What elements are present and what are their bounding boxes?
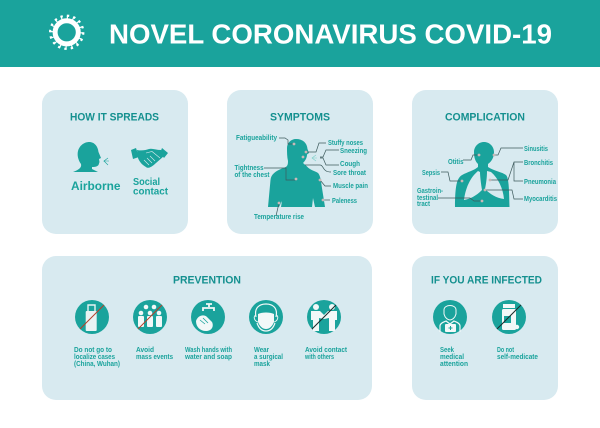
symptom labels: Paleness — [332, 198, 357, 205]
label: do not go: localize cases — [74, 354, 115, 361]
label: seek medical attention — [440, 347, 468, 368]
header band — [0, 0, 600, 67]
symptom labels: Sneezing — [340, 148, 367, 155]
symptom markers — [278, 143, 324, 204]
label: avoid mass events: mass events — [136, 354, 173, 361]
complication labels: Gastroin- — [417, 188, 444, 195]
label: seek medical attention: medical — [440, 354, 464, 361]
label: wear mask — [254, 347, 283, 368]
label: wash hands: Wash hands with — [185, 347, 232, 354]
panel: complication — [412, 90, 558, 234]
symptom labels: Stuffy noses — [328, 140, 363, 147]
heading: how it spreads: HOW IT SPREADS — [70, 112, 159, 124]
symptom labels: Fatigueability — [236, 135, 277, 142]
label: seek medical attention: attention — [440, 361, 468, 368]
label: avoid mass events — [136, 347, 173, 361]
complication labels: Bronchitis — [524, 160, 553, 167]
icon: virus — [50, 16, 83, 49]
label: wear mask: a surgical — [254, 354, 283, 361]
icon: handshake — [131, 148, 168, 168]
complication labels: Pneumonia — [524, 179, 556, 186]
label: wear mask: Wear — [254, 347, 269, 354]
complication labels: testinal — [417, 195, 438, 202]
label: avoid contact: Avoid contact — [305, 347, 348, 354]
complication labels: Myocarditis — [524, 196, 557, 203]
icon: avoid contact — [307, 300, 341, 334]
symptom labels: Temperature rise — [254, 214, 304, 221]
icon: no self medication — [492, 300, 526, 334]
label: do not self-medicate: Do not — [497, 347, 515, 354]
symptom labels: Sore throat — [333, 170, 367, 177]
panel: prevention — [42, 256, 372, 400]
heading: if you are infected: IF YOU ARE INFECTED — [431, 274, 542, 286]
label: wear mask: mask — [254, 361, 270, 368]
label: seek medical attention: Seek — [440, 347, 454, 354]
label: do not self-medicate: self-medicate — [497, 354, 538, 361]
label: avoid contact — [304, 347, 348, 361]
leader lines — [264, 138, 339, 216]
icon: wash hands — [191, 300, 225, 334]
symptom labels: Cough — [340, 161, 360, 168]
panel: how it spreads — [42, 90, 188, 234]
icon: doctor — [433, 300, 467, 334]
complication labels: Otitis — [448, 159, 464, 166]
panel: symptoms — [227, 90, 373, 234]
torso figure with lungs — [455, 142, 510, 207]
symptom labels: of the chest — [234, 172, 270, 179]
heading: prevention: PREVENTION — [173, 274, 241, 286]
heading: complication: COMPLICATION — [445, 112, 525, 124]
complication labels: tract — [417, 201, 431, 208]
icon: head breathing out — [73, 142, 109, 172]
label: do not self-medicate — [497, 347, 538, 361]
label: wash hands: water and soap — [184, 354, 232, 361]
symptom labels: Muscle pain — [333, 183, 368, 190]
label: avoid contact: with others — [304, 354, 334, 361]
heading: symptoms: SYMPTOMS — [270, 112, 330, 124]
complication markers — [461, 154, 495, 202]
symptom labels: Tightness — [234, 165, 264, 172]
complication labels — [417, 146, 557, 208]
leader lines — [438, 148, 523, 201]
panel: if you are infected — [412, 256, 558, 400]
label: do not go: (China, Wuhan) — [74, 361, 120, 368]
icon: surgical mask — [249, 300, 283, 334]
label: social contact: Social — [133, 177, 160, 188]
label: do not go: Do not go to — [74, 347, 112, 354]
icon: no travel — [75, 300, 109, 334]
label: do not go — [74, 347, 120, 368]
title: NOVEL CORONAVIRUS COVID-19 — [109, 18, 552, 50]
body figure — [268, 139, 325, 207]
complication labels: Sepsis — [422, 170, 440, 177]
complication labels: Sinusitis — [524, 146, 548, 153]
label: social contact — [133, 177, 169, 198]
label: social contact: contact — [133, 186, 169, 198]
symptom labels — [234, 135, 368, 221]
label: airborne: Airborne — [71, 179, 121, 193]
label: avoid mass events: Avoid — [136, 347, 154, 354]
icon: no mass events — [133, 300, 167, 334]
label: wash hands — [184, 347, 232, 361]
icon: sneeze lines — [312, 155, 317, 161]
